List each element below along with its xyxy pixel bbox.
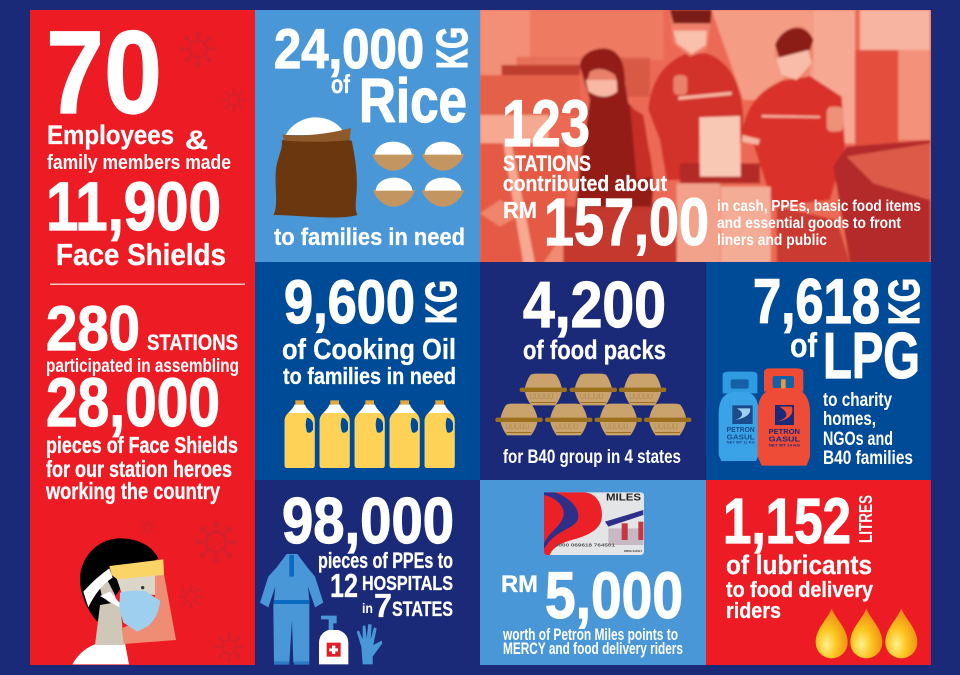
icon: gas cylinders: [719, 368, 810, 466]
number: 280: 280: [46, 294, 140, 364]
text: of: of: [331, 69, 350, 99]
icon: red cylinder: PETRON: [769, 429, 800, 436]
icon: blue cylinder: [719, 372, 759, 461]
panel: food packs: [480, 262, 706, 480]
icon: PPE suit: [260, 554, 323, 665]
panel: rice: [255, 10, 480, 262]
text: pieces: pieces of Face Shields: [46, 432, 238, 458]
icon: miles card: [544, 492, 644, 555]
text: in cash line 1: in cash, PPEs, basic food items: [717, 198, 921, 215]
text: participated: participated in assembling: [46, 356, 239, 377]
text: stations: STATIONS: [503, 151, 591, 176]
panel: cooking oil: [255, 262, 480, 480]
icon: miles card: MILES: [606, 493, 641, 504]
icon: virus top: [180, 31, 216, 67]
icon: virus lower small: [140, 519, 156, 535]
text: of: of: [790, 327, 818, 365]
number: 9,600: 9,600: [284, 268, 415, 336]
icon: glove: [357, 624, 382, 664]
icon: hand sanitizer: [319, 616, 348, 664]
panel: LPG: [706, 262, 931, 480]
number: 157,00: 157,00: [544, 185, 709, 260]
text: KG: KG: [417, 280, 466, 324]
text: contributed about: contributed about: [503, 171, 668, 196]
text: NGOs and: NGOs and: [823, 429, 893, 450]
icon: virus bottom: [214, 632, 244, 662]
heading: 70: 70: [46, 7, 162, 139]
text: riders: riders: [726, 598, 781, 623]
number: 1,152: 1,152: [723, 485, 851, 557]
panel: Petron Miles: [480, 480, 706, 665]
panel: lubricants: [706, 480, 931, 665]
text: of lubricants: of lubricants: [726, 550, 872, 580]
icon: rice sack: [273, 117, 357, 218]
number: 7,618: 7,618: [753, 267, 880, 337]
text: to food delivery: to food delivery: [726, 577, 874, 602]
number: 4,200: 4,200: [523, 268, 666, 341]
text: of food packs: of food packs: [523, 335, 666, 365]
text: to families in need: to families in need: [274, 224, 465, 251]
number: 123: 123: [502, 86, 590, 160]
icon: rice bowls: [372, 142, 464, 207]
icon: blue cylinder: PETRON: [727, 427, 755, 434]
icon: person with face shield: [72, 538, 176, 664]
number: 98,000: 98,000: [282, 484, 454, 557]
number: 5,000: 5,000: [545, 558, 683, 632]
icon: red cylinder: NET WT 14 KG: [769, 444, 800, 448]
text: mercy: MERCY and food delivery riders: [503, 640, 683, 658]
icon: virus mid: [179, 585, 203, 609]
number: 11,900: 11,900: [46, 168, 221, 245]
text: states: STATES: [392, 598, 453, 621]
text: to charity: to charity: [823, 390, 892, 411]
icon: oil drops: [816, 608, 917, 658]
text: employees: Employees: [47, 120, 174, 150]
photo: staff with donated goods, red duotone: [480, 10, 930, 263]
text: B40 families: B40 families: [823, 448, 913, 469]
text: in cash line 2: and essential goods to front: [717, 215, 901, 232]
text: stations: STATIONS: [147, 330, 238, 355]
icon: red cylinder: [758, 368, 810, 466]
text: litres: LITRES: [856, 495, 876, 543]
number: 12: 12: [330, 567, 358, 604]
text: worth of miles: worth of Petron Miles points to: [502, 626, 678, 644]
heading: LPG: LPG: [823, 319, 920, 392]
panel: face shields: [30, 7, 255, 665]
panel: stations photo: [480, 10, 931, 263]
icon: miles card: DRIVE SAFELY: [624, 549, 642, 553]
text: face shields: Face Shields: [56, 237, 226, 272]
heading: Rice: Rice: [359, 67, 467, 136]
text: pieces of PPEs: pieces of PPEs to: [318, 548, 453, 573]
number: 24,000: 24,000: [274, 17, 424, 80]
text: KG: KG: [428, 27, 477, 69]
text: of cooking oil: of Cooking Oil: [282, 334, 456, 366]
text: homes: homes,: [823, 409, 876, 430]
icon: blue cylinder: GASUL: [727, 434, 755, 441]
text: RM: RM: [503, 197, 537, 223]
text: in: in: [362, 600, 373, 616]
icon: miles card: 0000 069618 764501: [555, 543, 616, 548]
icon: blue cylinder: NET WT 11 KG: [727, 441, 755, 445]
text: working the country: working the country: [45, 478, 220, 504]
icon: oil bottles: [285, 400, 455, 468]
text: in cash line 3: liners and public: [717, 232, 827, 249]
text: for B40 group: for B40 group in 4 states: [503, 447, 681, 468]
text: family members: family members made: [47, 152, 231, 174]
text: KG: KG: [880, 278, 929, 325]
icon: red cylinder: GASUL: [769, 437, 801, 444]
icon: food packs: [495, 374, 691, 435]
text: for our station heroes: for our station heroes: [46, 456, 232, 482]
panel: PPEs: [255, 480, 480, 665]
number: 7: 7: [374, 587, 392, 624]
text: to families in need: to families in need: [283, 363, 456, 389]
number: 28,000: 28,000: [46, 364, 220, 441]
text: ampersand: &: [185, 125, 208, 155]
text: hospitals: HOSPITALS: [362, 573, 453, 595]
icon: virus lower big: [195, 521, 237, 563]
text: RM: RM: [501, 571, 538, 598]
icon: virus small: [222, 88, 246, 112]
